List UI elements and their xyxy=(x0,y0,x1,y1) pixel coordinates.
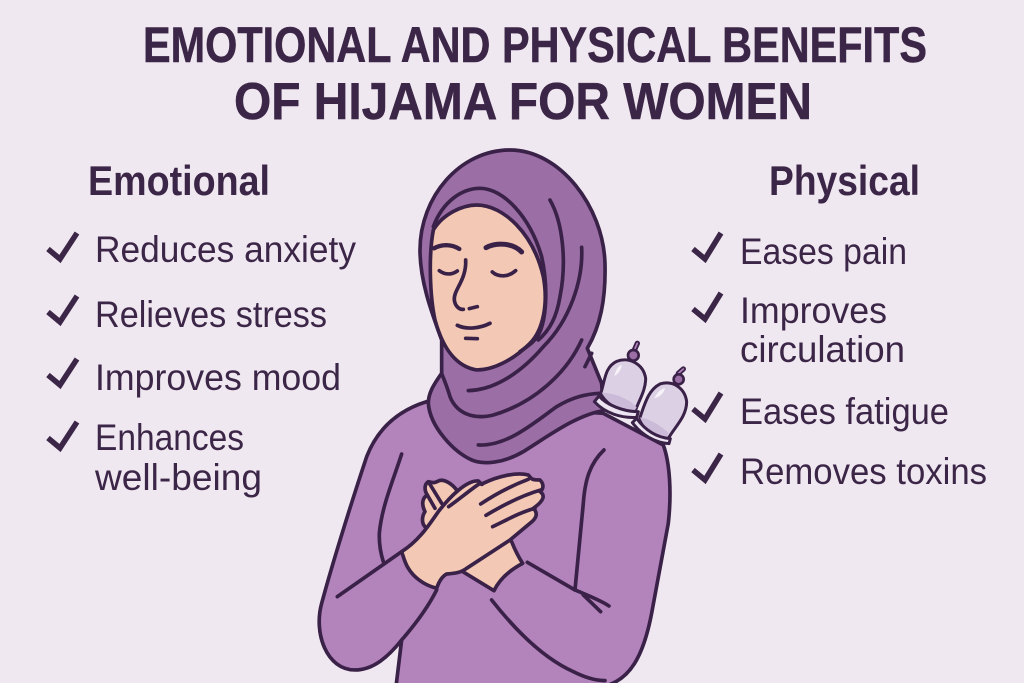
back hand xyxy=(422,480,523,591)
heading: physical: Physical xyxy=(769,157,920,204)
hijab and face xyxy=(420,150,605,463)
item: enhances well-being: Enhances xyxy=(95,417,244,458)
eyebrows, eyes, nose, mouth xyxy=(434,245,459,249)
item: eases pain: Eases pain xyxy=(740,231,907,272)
item: improves circulation: circulation xyxy=(740,329,905,370)
item: improves mood: Improves mood xyxy=(95,357,341,398)
item: improves circulation xyxy=(693,290,905,370)
front hand xyxy=(402,474,543,588)
title: OF HIJAMA FOR WOMEN xyxy=(234,73,812,131)
item: enhances well-being: well-being xyxy=(94,457,262,498)
item: reduces anxiety: Reduces anxiety xyxy=(95,229,356,270)
item: removes toxins: Removes toxins xyxy=(740,451,987,492)
cup 1 xyxy=(594,343,646,417)
face xyxy=(430,205,545,370)
item: enhances well-being xyxy=(48,417,262,498)
item: relieves stress: Relieves stress xyxy=(95,294,327,335)
heading: emotional: Emotional xyxy=(88,157,270,204)
cupping cups xyxy=(594,343,687,444)
illustration: woman with cups xyxy=(319,150,687,683)
item: eases fatigue: Eases fatigue xyxy=(740,391,949,432)
item: improves circulation: Improves xyxy=(740,290,887,331)
title xyxy=(143,17,927,131)
cup 2 xyxy=(632,369,687,444)
body and arms xyxy=(319,402,670,683)
panel: emotional benefits xyxy=(48,157,356,498)
panel: physical benefits xyxy=(693,157,987,492)
